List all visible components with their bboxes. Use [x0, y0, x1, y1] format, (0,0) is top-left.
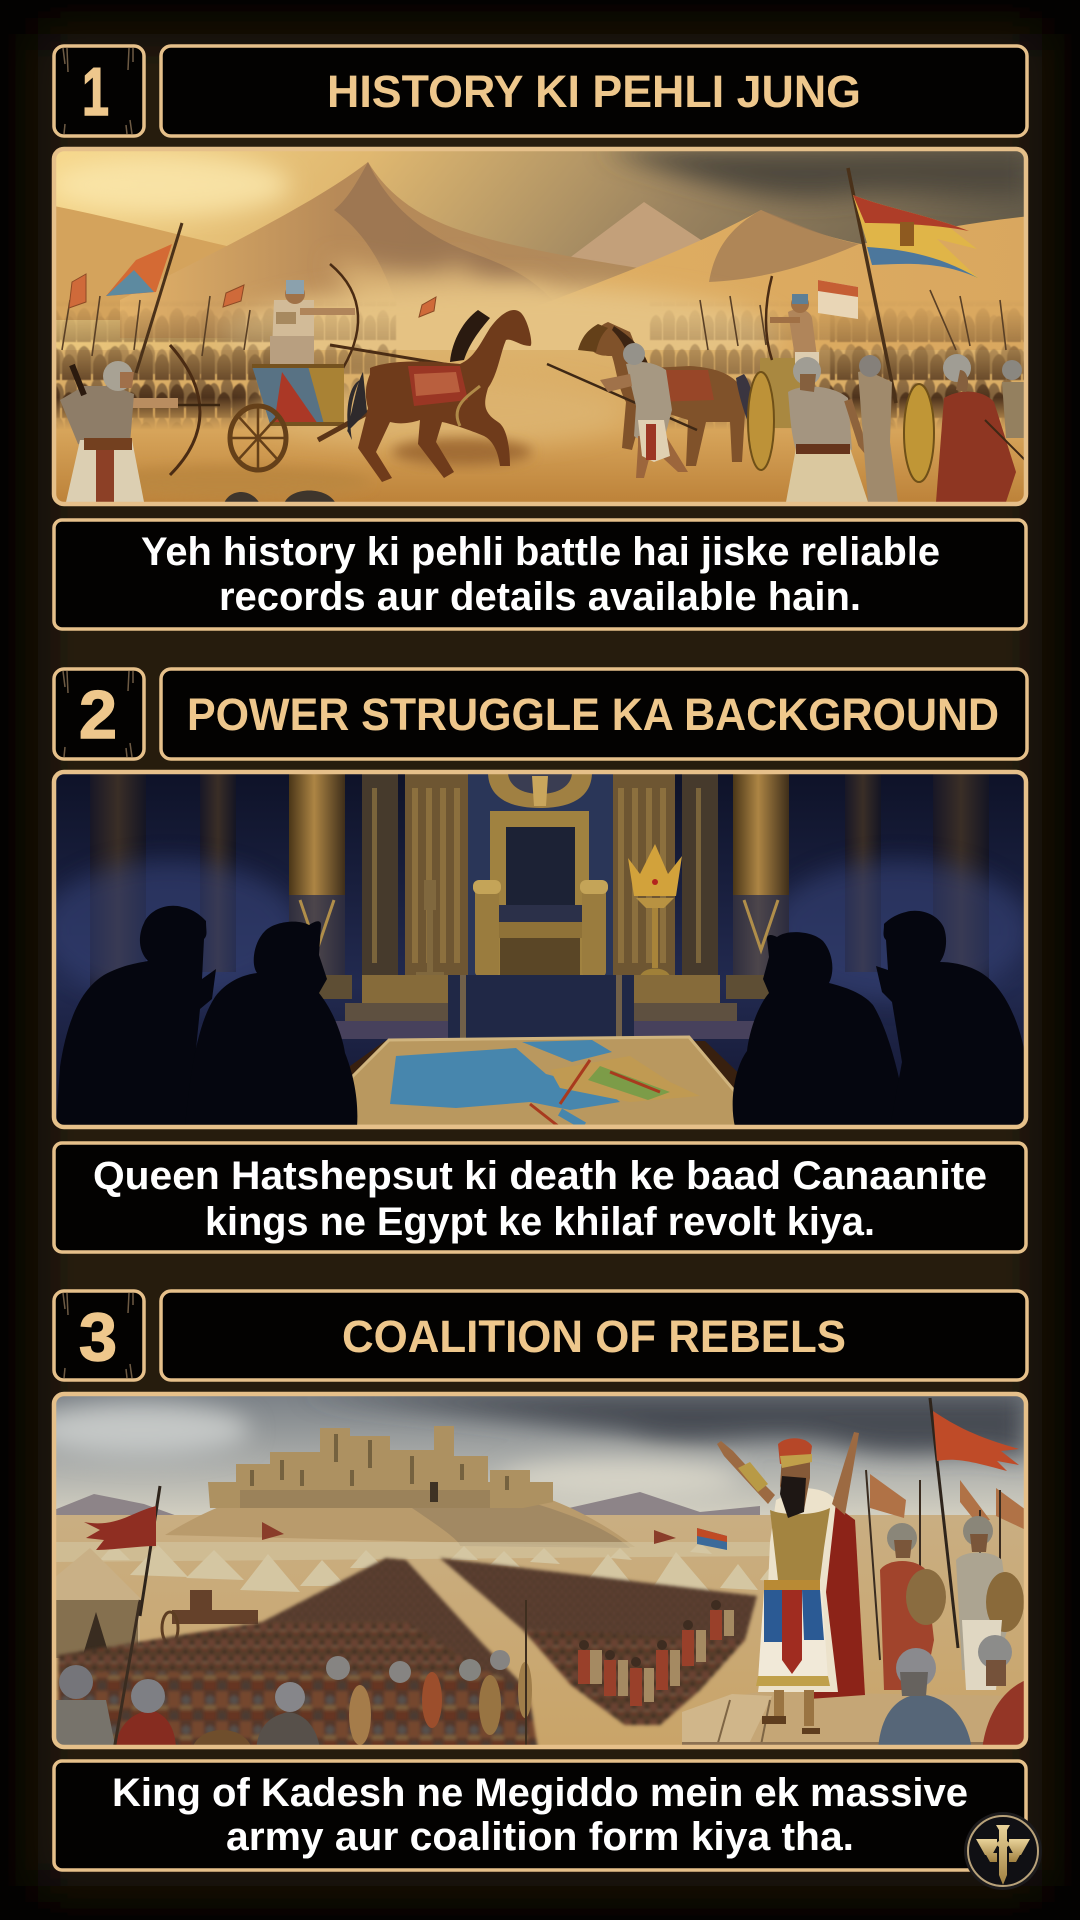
guards — [880, 1516, 1024, 1690]
left archer — [60, 345, 220, 502]
title bar 3: COALITION OF REBELS — [342, 1311, 846, 1362]
far dunes and peaks — [56, 206, 226, 320]
caption 1 — [54, 520, 1026, 629]
foreground soldiers left — [54, 1600, 532, 1774]
stone platform — [682, 1692, 1026, 1750]
caption 2: kings ne Egypt ke khilaf revolt kiya. — [205, 1200, 875, 1244]
spearman — [547, 343, 697, 478]
dust haze — [332, 256, 543, 300]
throne — [473, 811, 608, 976]
chariot with archer — [230, 264, 450, 470]
fortress — [208, 1426, 553, 1508]
icon: sword emblem badge — [964, 1812, 1042, 1890]
gold wall panels — [362, 772, 398, 982]
left war horse — [347, 310, 531, 482]
army crowd — [58, 1558, 757, 1750]
number badge 1: 1 — [82, 54, 109, 130]
right chariot and archer — [760, 276, 819, 428]
map — [352, 1036, 734, 1125]
red soldier with shield — [858, 354, 1026, 502]
caption 2: Queen Hatshepsut ki death ke baad Canaanite — [93, 1154, 987, 1198]
title bar 3 — [161, 1291, 1027, 1380]
big left tent — [54, 1548, 140, 1658]
storm clouds — [30, 1394, 1026, 1500]
caption 3 — [54, 1761, 1026, 1870]
illustration: desert chariot battle — [50, 149, 1031, 505]
left flag and pole — [136, 223, 182, 373]
caption 3: army aur coalition form kiya tha. — [226, 1815, 854, 1859]
front ranks right of path — [578, 1600, 734, 1706]
table — [350, 1041, 738, 1088]
dark columns — [90, 772, 146, 997]
steps and carpet — [362, 975, 720, 1005]
right war horses — [578, 322, 754, 466]
left flag — [140, 1486, 160, 1616]
caption 1: Yeh history ki pehli battle hai jiske reliable — [141, 530, 940, 574]
clouds — [50, 150, 1030, 215]
title bar 2: POWER STRUGGLE KA BACKGROUND — [187, 689, 999, 740]
number badge 2: 2 — [79, 677, 117, 753]
number badge 3: 3 — [79, 1299, 117, 1375]
camp flags — [262, 1522, 676, 1544]
cart — [172, 1590, 258, 1624]
title bar 2 — [161, 669, 1027, 759]
caption 1: records aur details available hain. — [219, 575, 861, 619]
caption 2 — [54, 1143, 1026, 1252]
right silhouettes — [733, 911, 1026, 1127]
distant armies — [56, 300, 1026, 430]
hill — [166, 1500, 628, 1542]
king of Kadesh — [717, 1432, 865, 1734]
caption 3: King of Kadesh ne Megiddo mein ek massive — [112, 1771, 968, 1815]
rocks — [224, 490, 335, 502]
tents — [54, 1542, 788, 1594]
panel: section 1 — [50, 46, 1031, 629]
panel: section 2 — [40, 669, 1030, 1252]
left silhouettes — [56, 906, 357, 1127]
panel: section 3 — [30, 1291, 1027, 1870]
illustration: rebel army at Megiddo — [30, 1394, 1026, 1774]
right flags and spears — [930, 1398, 958, 1648]
right flag and pole — [848, 168, 896, 403]
small flags — [69, 274, 436, 317]
title bar 1: HISTORY KI PEHLI JUNG — [327, 66, 861, 117]
gold pillars — [289, 772, 345, 977]
number badge 1 — [54, 46, 144, 136]
number badge 2 — [54, 669, 144, 759]
title bar 1 — [161, 46, 1027, 136]
side stand — [416, 880, 444, 976]
illustration: throne room conspiracy — [40, 772, 1030, 1127]
shield soldier — [747, 357, 868, 502]
crown on stand — [628, 844, 682, 976]
foreground soldiers right — [878, 1635, 1026, 1750]
number badge 3 — [54, 1291, 144, 1380]
fog — [40, 860, 300, 1000]
sun crest — [488, 772, 592, 808]
